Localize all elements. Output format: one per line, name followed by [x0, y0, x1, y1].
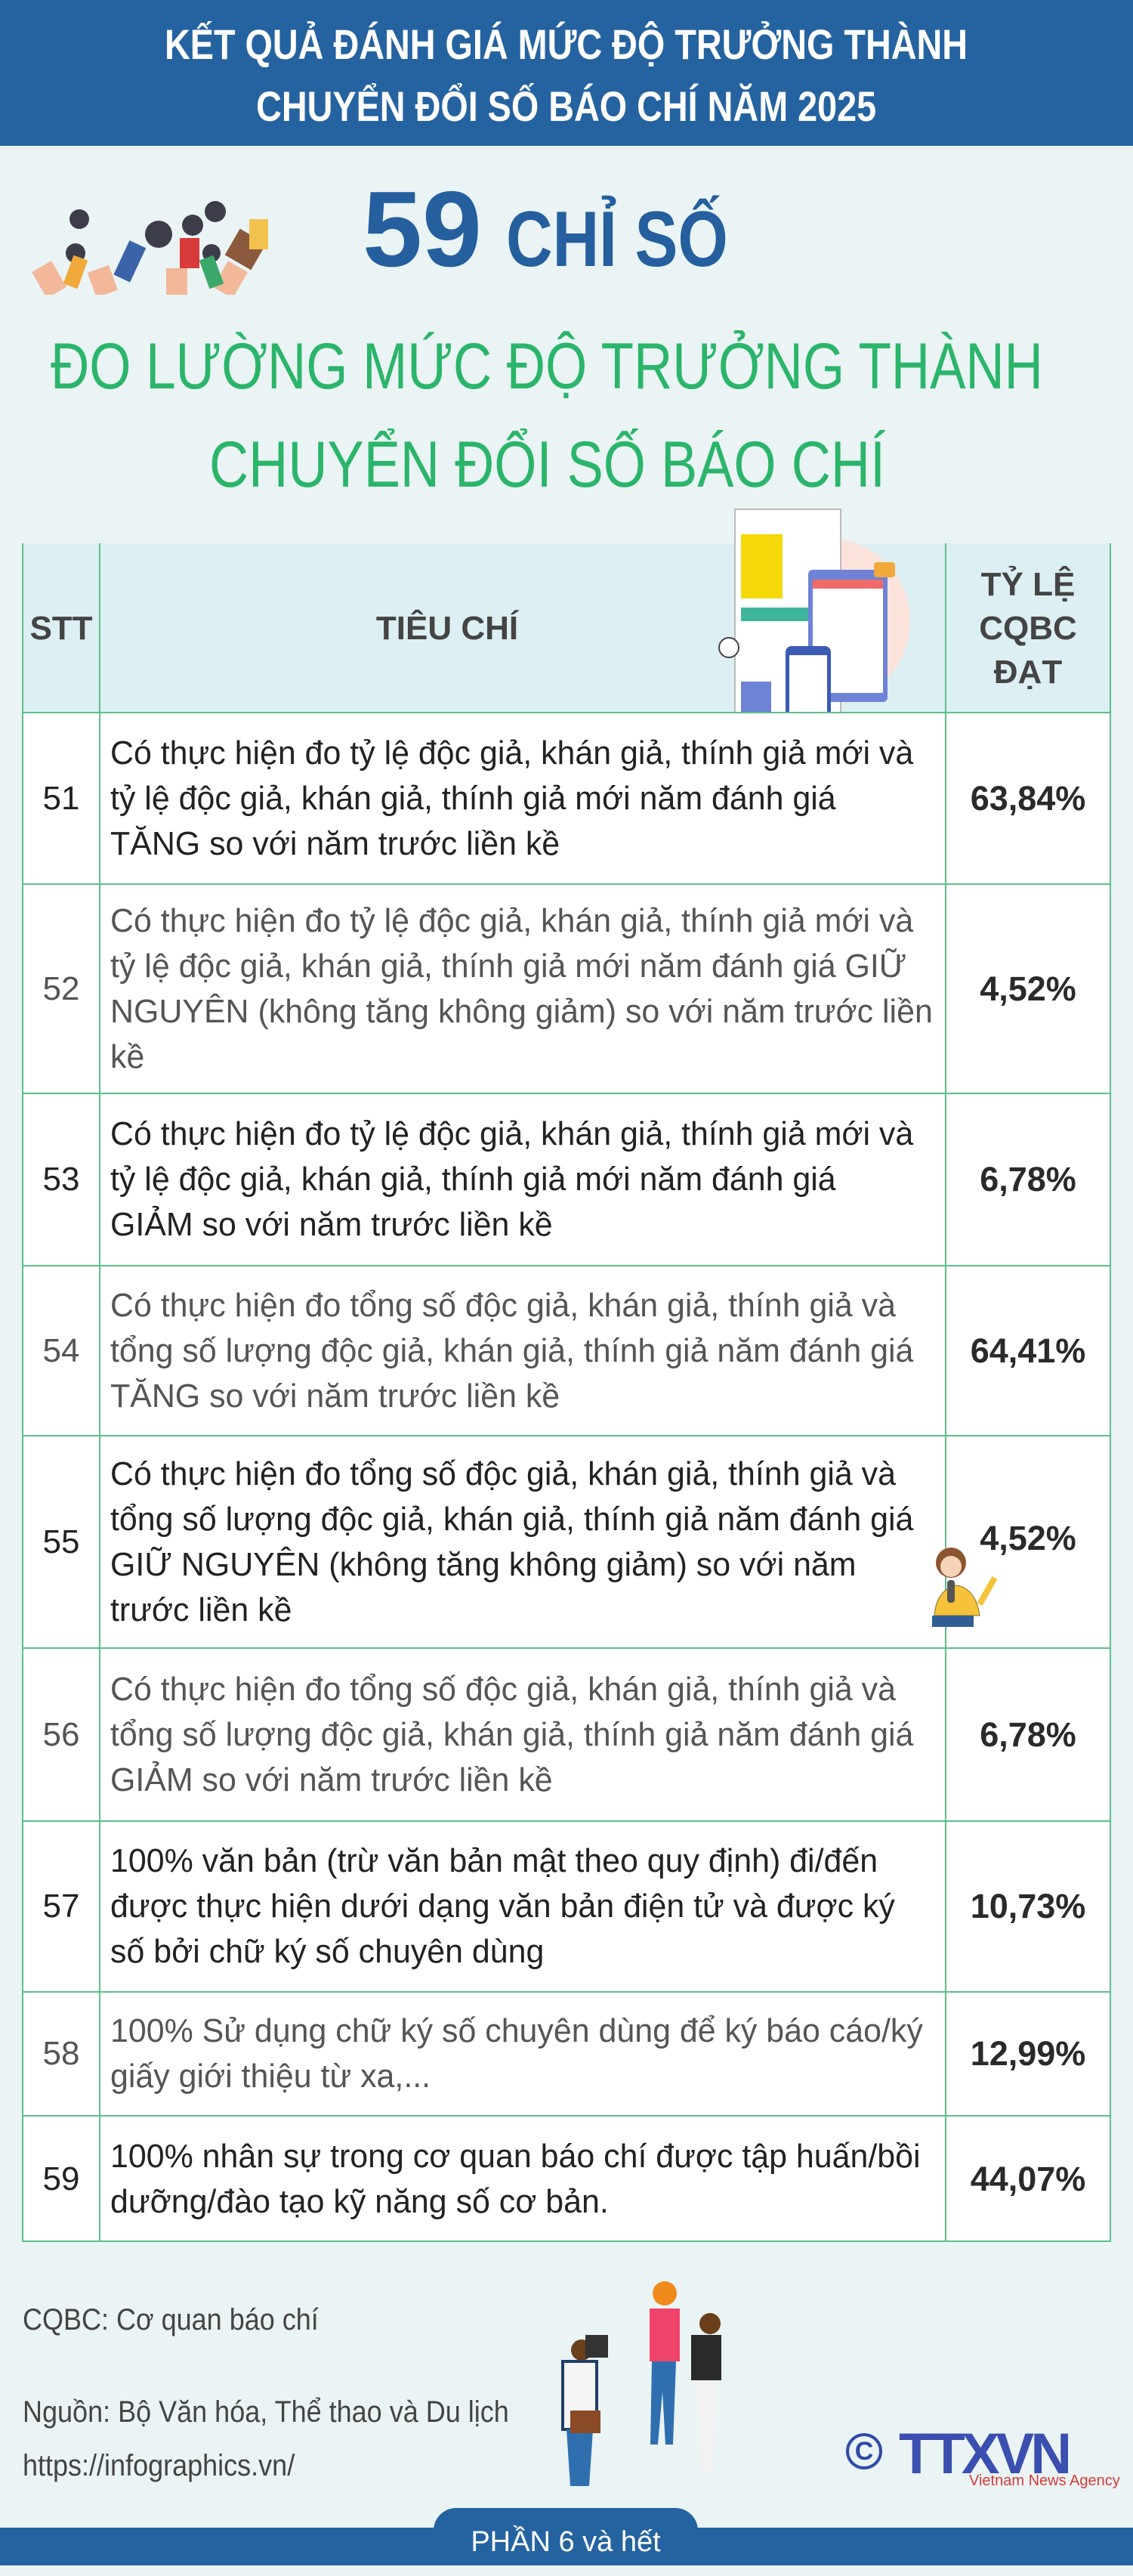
- table header: ĐẠT: [994, 653, 1062, 691]
- row 59: [23, 2115, 1110, 2242]
- footnote: url: https://infographics.vn/: [23, 2449, 295, 2482]
- footer tab: part label: [434, 2508, 698, 2565]
- header band: KẾT QUẢ ĐÁNH GIÁ MỨC ĐỘ TRƯỞNG THÀNH: [165, 20, 968, 68]
- footer band: [0, 2528, 1133, 2565]
- table: [22, 543, 1111, 2242]
- row 51: Có thực hiện đo tỷ lệ độc giả, khán giả, thính giả mới và: [110, 734, 913, 771]
- footnote: source: Nguồn: Bộ Văn hóa, Thể thao và Du lịch: [23, 2395, 509, 2429]
- row 56: tổng số lượng độc giả, khán giả, thính giả năm đánh giá: [110, 1715, 913, 1753]
- row 52: NGUYÊN (không tăng không giảm) so với năm trước liền: [110, 993, 933, 1029]
- row 55: [23, 1435, 1110, 1647]
- row 56: Có thực hiện đo tổng số độc giả, khán giả, thính giả và: [110, 1670, 896, 1708]
- logo: TTXVN: [846, 2422, 1120, 2489]
- row 57: 100% văn bản (trừ văn bản mật theo quy định) đi/đến: [110, 1842, 878, 1879]
- table header: TỶ LỆ: [981, 565, 1075, 603]
- row 56: 6,78%: [980, 1715, 1076, 1753]
- icon: microphones: [32, 201, 268, 295]
- row 51: 51: [43, 780, 79, 816]
- row 51: 63,84%: [971, 778, 1085, 818]
- heading: 59 chỉ số: [363, 169, 728, 289]
- row 54: [23, 1265, 1110, 1435]
- logo: TTXVN: C: [855, 2437, 873, 2466]
- logo: TTXVN: TTXVN: [899, 2422, 1068, 2486]
- row 54: 54: [43, 1331, 79, 1369]
- row 51: tỷ lệ độc giả, khán giả, thính giả mới năm đánh giá: [110, 780, 836, 816]
- icon: news devices: [718, 509, 910, 712]
- row 57: số bởi chữ ký số chuyên dùng: [110, 1933, 544, 1970]
- icon: reporter woman: [932, 1548, 997, 1627]
- row 55: trước liền kề: [110, 1591, 292, 1628]
- heading: green subtitle: ĐO LƯỜNG MỨC ĐỘ TRƯỞNG THÀNH: [51, 330, 1043, 403]
- heading: green subtitle: CHUYỂN ĐỔI SỐ BÁO CHÍ: [209, 428, 885, 501]
- row 53: [23, 1093, 1110, 1265]
- row 57: 10,73%: [971, 1887, 1085, 1925]
- header band: [0, 0, 1133, 146]
- row 55: GIỮ NGUYÊN (không tăng không giảm) so với năm: [110, 1546, 857, 1582]
- heading: green subtitle: [51, 330, 1043, 501]
- footer tab: part label: PHẦN 6 và hết: [471, 2526, 661, 2558]
- row 59: dưỡng/đào tạo kỹ năng số cơ bản.: [110, 2183, 609, 2220]
- row 55: 55: [43, 1523, 79, 1560]
- logo: TTXVN: Vietnam News Agency: [969, 2472, 1120, 2489]
- row 58: 100% Sử dụng chữ ký số chuyên dùng để ký báo cáo/ký: [110, 2012, 923, 2049]
- row 55: 4,52%: [980, 1519, 1076, 1557]
- row 56: 56: [43, 1715, 79, 1753]
- row 55: Có thực hiện đo tổng số độc giả, khán giả, thính giả và: [110, 1455, 896, 1492]
- row 53: 53: [43, 1161, 79, 1198]
- row 59: 100% nhân sự trong cơ quan báo chí được tập huấn/bồi: [110, 2138, 921, 2175]
- row 57: 57: [43, 1888, 79, 1925]
- row 59: 44,07%: [971, 2160, 1085, 2198]
- row 51: [23, 712, 1110, 883]
- row 57: [23, 1820, 1110, 1991]
- row 55: tổng số lượng độc giả, khán giả, thính giả năm đánh giá: [110, 1501, 913, 1537]
- row 56: [23, 1647, 1110, 1820]
- row 58: 12,99%: [971, 2034, 1085, 2073]
- row 56: GIẢM so với năm trước liền kề: [110, 1761, 553, 1798]
- table header: TIÊU CHÍ: [376, 609, 518, 647]
- row 53: tỷ lệ độc giả, khán giả, thính giả mới năm đánh giá: [110, 1161, 836, 1198]
- row 52: [23, 883, 1110, 1093]
- illustration: reporters: [561, 2281, 721, 2486]
- row 54: TĂNG so với năm trước liền kề: [110, 1377, 560, 1415]
- row 52: tỷ lệ độc giả, khán giả, thính giả mới năm đánh giá GIỮ: [110, 948, 906, 984]
- row 52: Có thực hiện đo tỷ lệ độc giả, khán giả, thính giả mới và: [110, 902, 913, 939]
- row 53: 6,78%: [980, 1160, 1076, 1198]
- row 58: [23, 1991, 1110, 2115]
- table header: [23, 543, 1110, 713]
- row 53: Có thực hiện đo tỷ lệ độc giả, khán giả, thính giả mới và: [110, 1115, 913, 1152]
- heading: 59 chỉ số: CHỈ SỐ: [506, 196, 728, 283]
- row 54: Có thực hiện đo tổng số độc giả, khán giả, thính giả và: [110, 1286, 896, 1324]
- footnote: CQBC: CQBC: Cơ quan báo chí: [23, 2303, 319, 2336]
- table header: STT: [29, 609, 93, 647]
- row 51: TĂNG so với năm trước liền kề: [110, 825, 560, 861]
- row 54: tổng số lượng độc giả, khán giả, thính giả năm đánh giá: [110, 1331, 913, 1369]
- row 52: 52: [43, 970, 79, 1007]
- row 58: 58: [43, 2035, 79, 2072]
- row 59: 59: [43, 2160, 79, 2197]
- row 54: 64,41%: [971, 1331, 1085, 1369]
- row 52: kề: [110, 1038, 144, 1075]
- row 53: GIẢM so với năm trước liền kề: [110, 1206, 553, 1243]
- heading: 59 chỉ số: 59: [363, 169, 482, 289]
- table header: CQBC: [979, 609, 1077, 647]
- row 52: 4,52%: [980, 969, 1076, 1008]
- header band: CHUYỂN ĐỔI SỐ BÁO CHÍ NĂM 2025: [256, 82, 877, 130]
- row 58: giấy giới thiệu từ xa,...: [110, 2058, 431, 2095]
- row 57: được thực hiện dưới dạng văn bản điện tử và được ký: [110, 1888, 895, 1925]
